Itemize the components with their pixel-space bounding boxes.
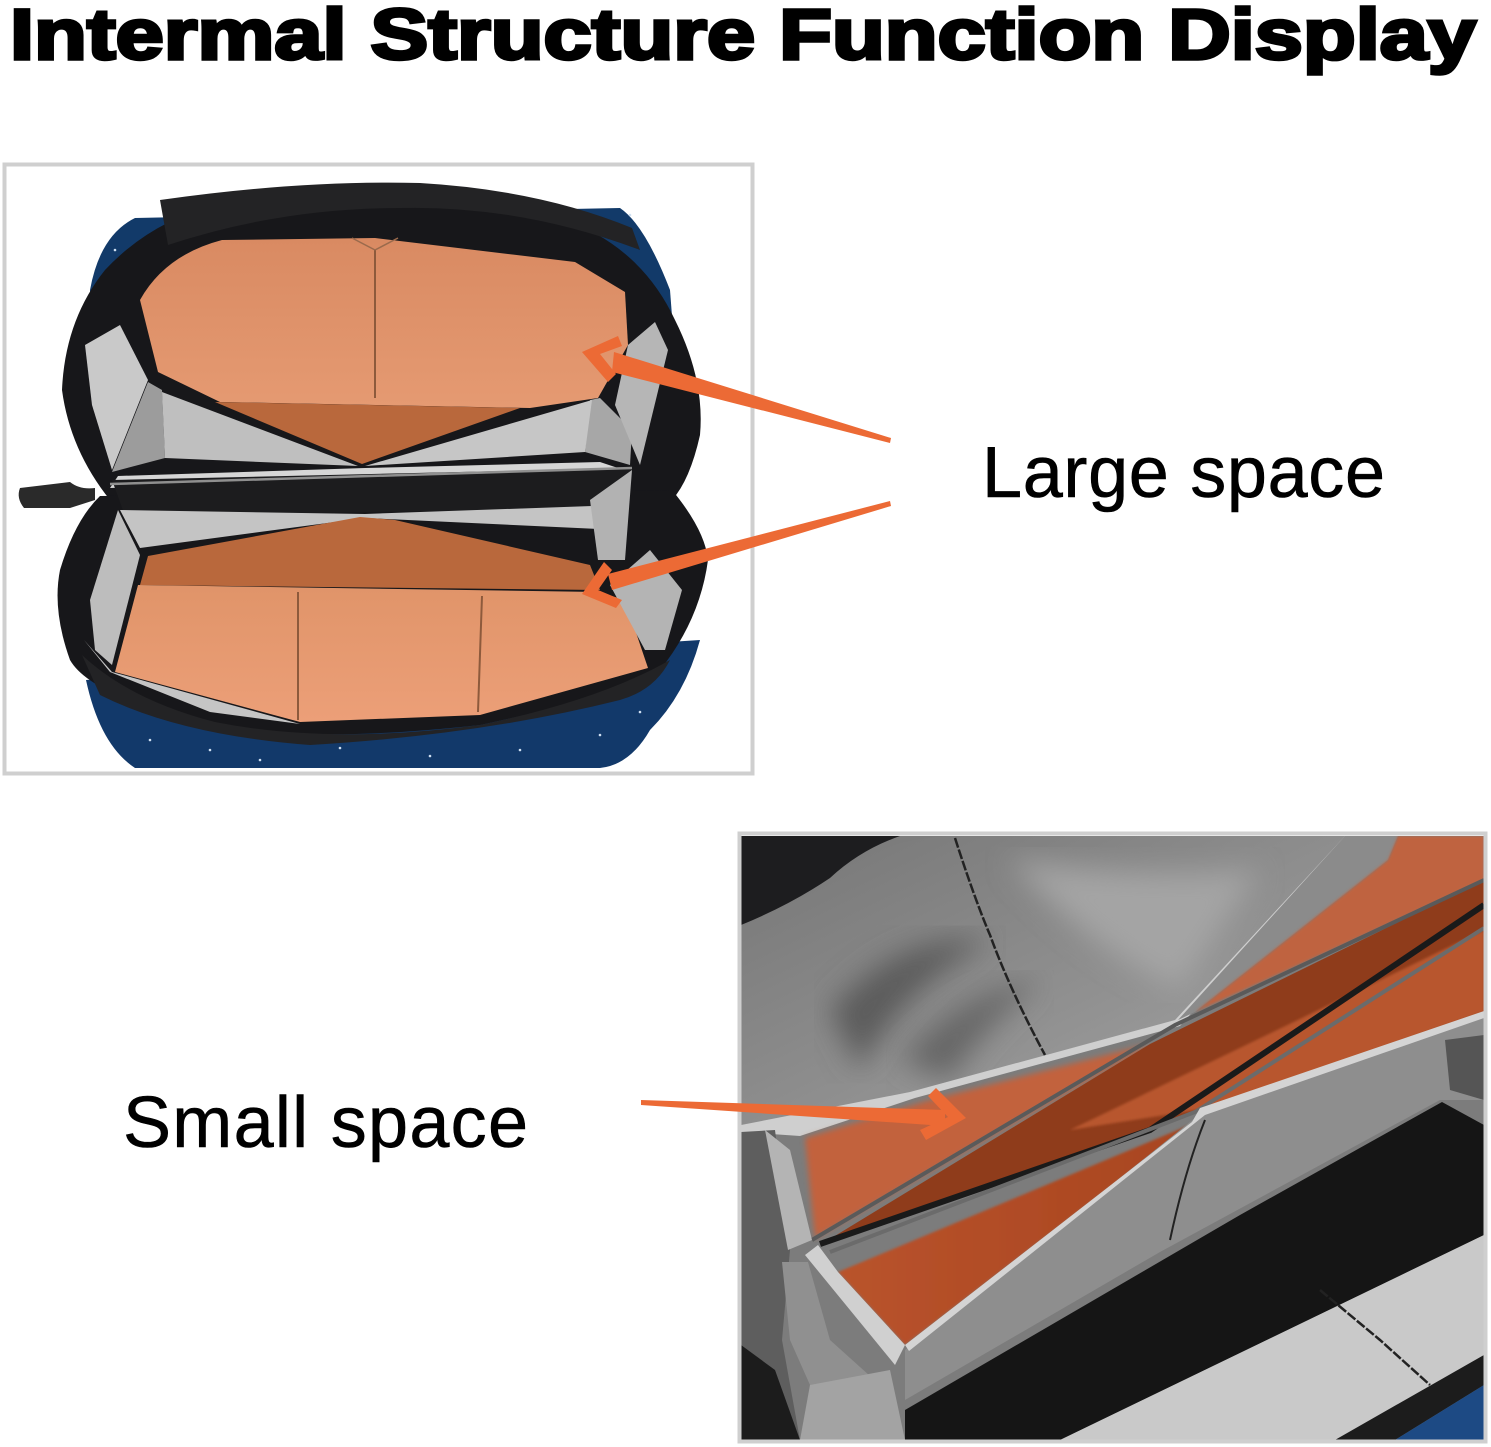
label: small space: Small space (123, 1083, 528, 1163)
panel: pocket close-up (741, 836, 1484, 1440)
dark top-left corner (741, 836, 900, 925)
lower compartment rim (58, 490, 708, 745)
bottom right strap (1335, 1355, 1484, 1440)
zipper pull (19, 482, 95, 508)
arrow: large space, top (582, 336, 891, 443)
orange wedge, lower (838, 1124, 1192, 1345)
middle zipped pocket (110, 468, 632, 548)
top orange lining (140, 238, 628, 464)
panel: full bag interior (18, 182, 708, 768)
lower grey lining (905, 1011, 1484, 1400)
upper grey lining (741, 836, 1345, 1125)
arrow: small space (641, 1088, 966, 1140)
centre dark orange (820, 880, 1484, 1245)
zipper (812, 880, 1484, 1252)
light pocket edge (741, 836, 1350, 1136)
bag body: blue (86, 208, 700, 768)
light grey bottom lining (1060, 1235, 1484, 1440)
black pocket band (905, 1102, 1484, 1440)
label: large space: Large space (982, 433, 1385, 513)
panel 2 frame (740, 834, 1486, 1442)
top right grey and orange (1178, 836, 1484, 1020)
orange wedge, left upper (805, 1044, 1150, 1238)
left folded fabric (741, 1130, 905, 1440)
top compartment rim (62, 183, 701, 500)
grey side panels, bottom (84, 470, 682, 724)
arrow: large space, bottom (582, 501, 891, 608)
speckles on the blue shell (114, 214, 641, 761)
grey side panels, top (85, 322, 668, 488)
bottom orange lining (115, 517, 648, 722)
panel 1 frame (4, 164, 752, 774)
